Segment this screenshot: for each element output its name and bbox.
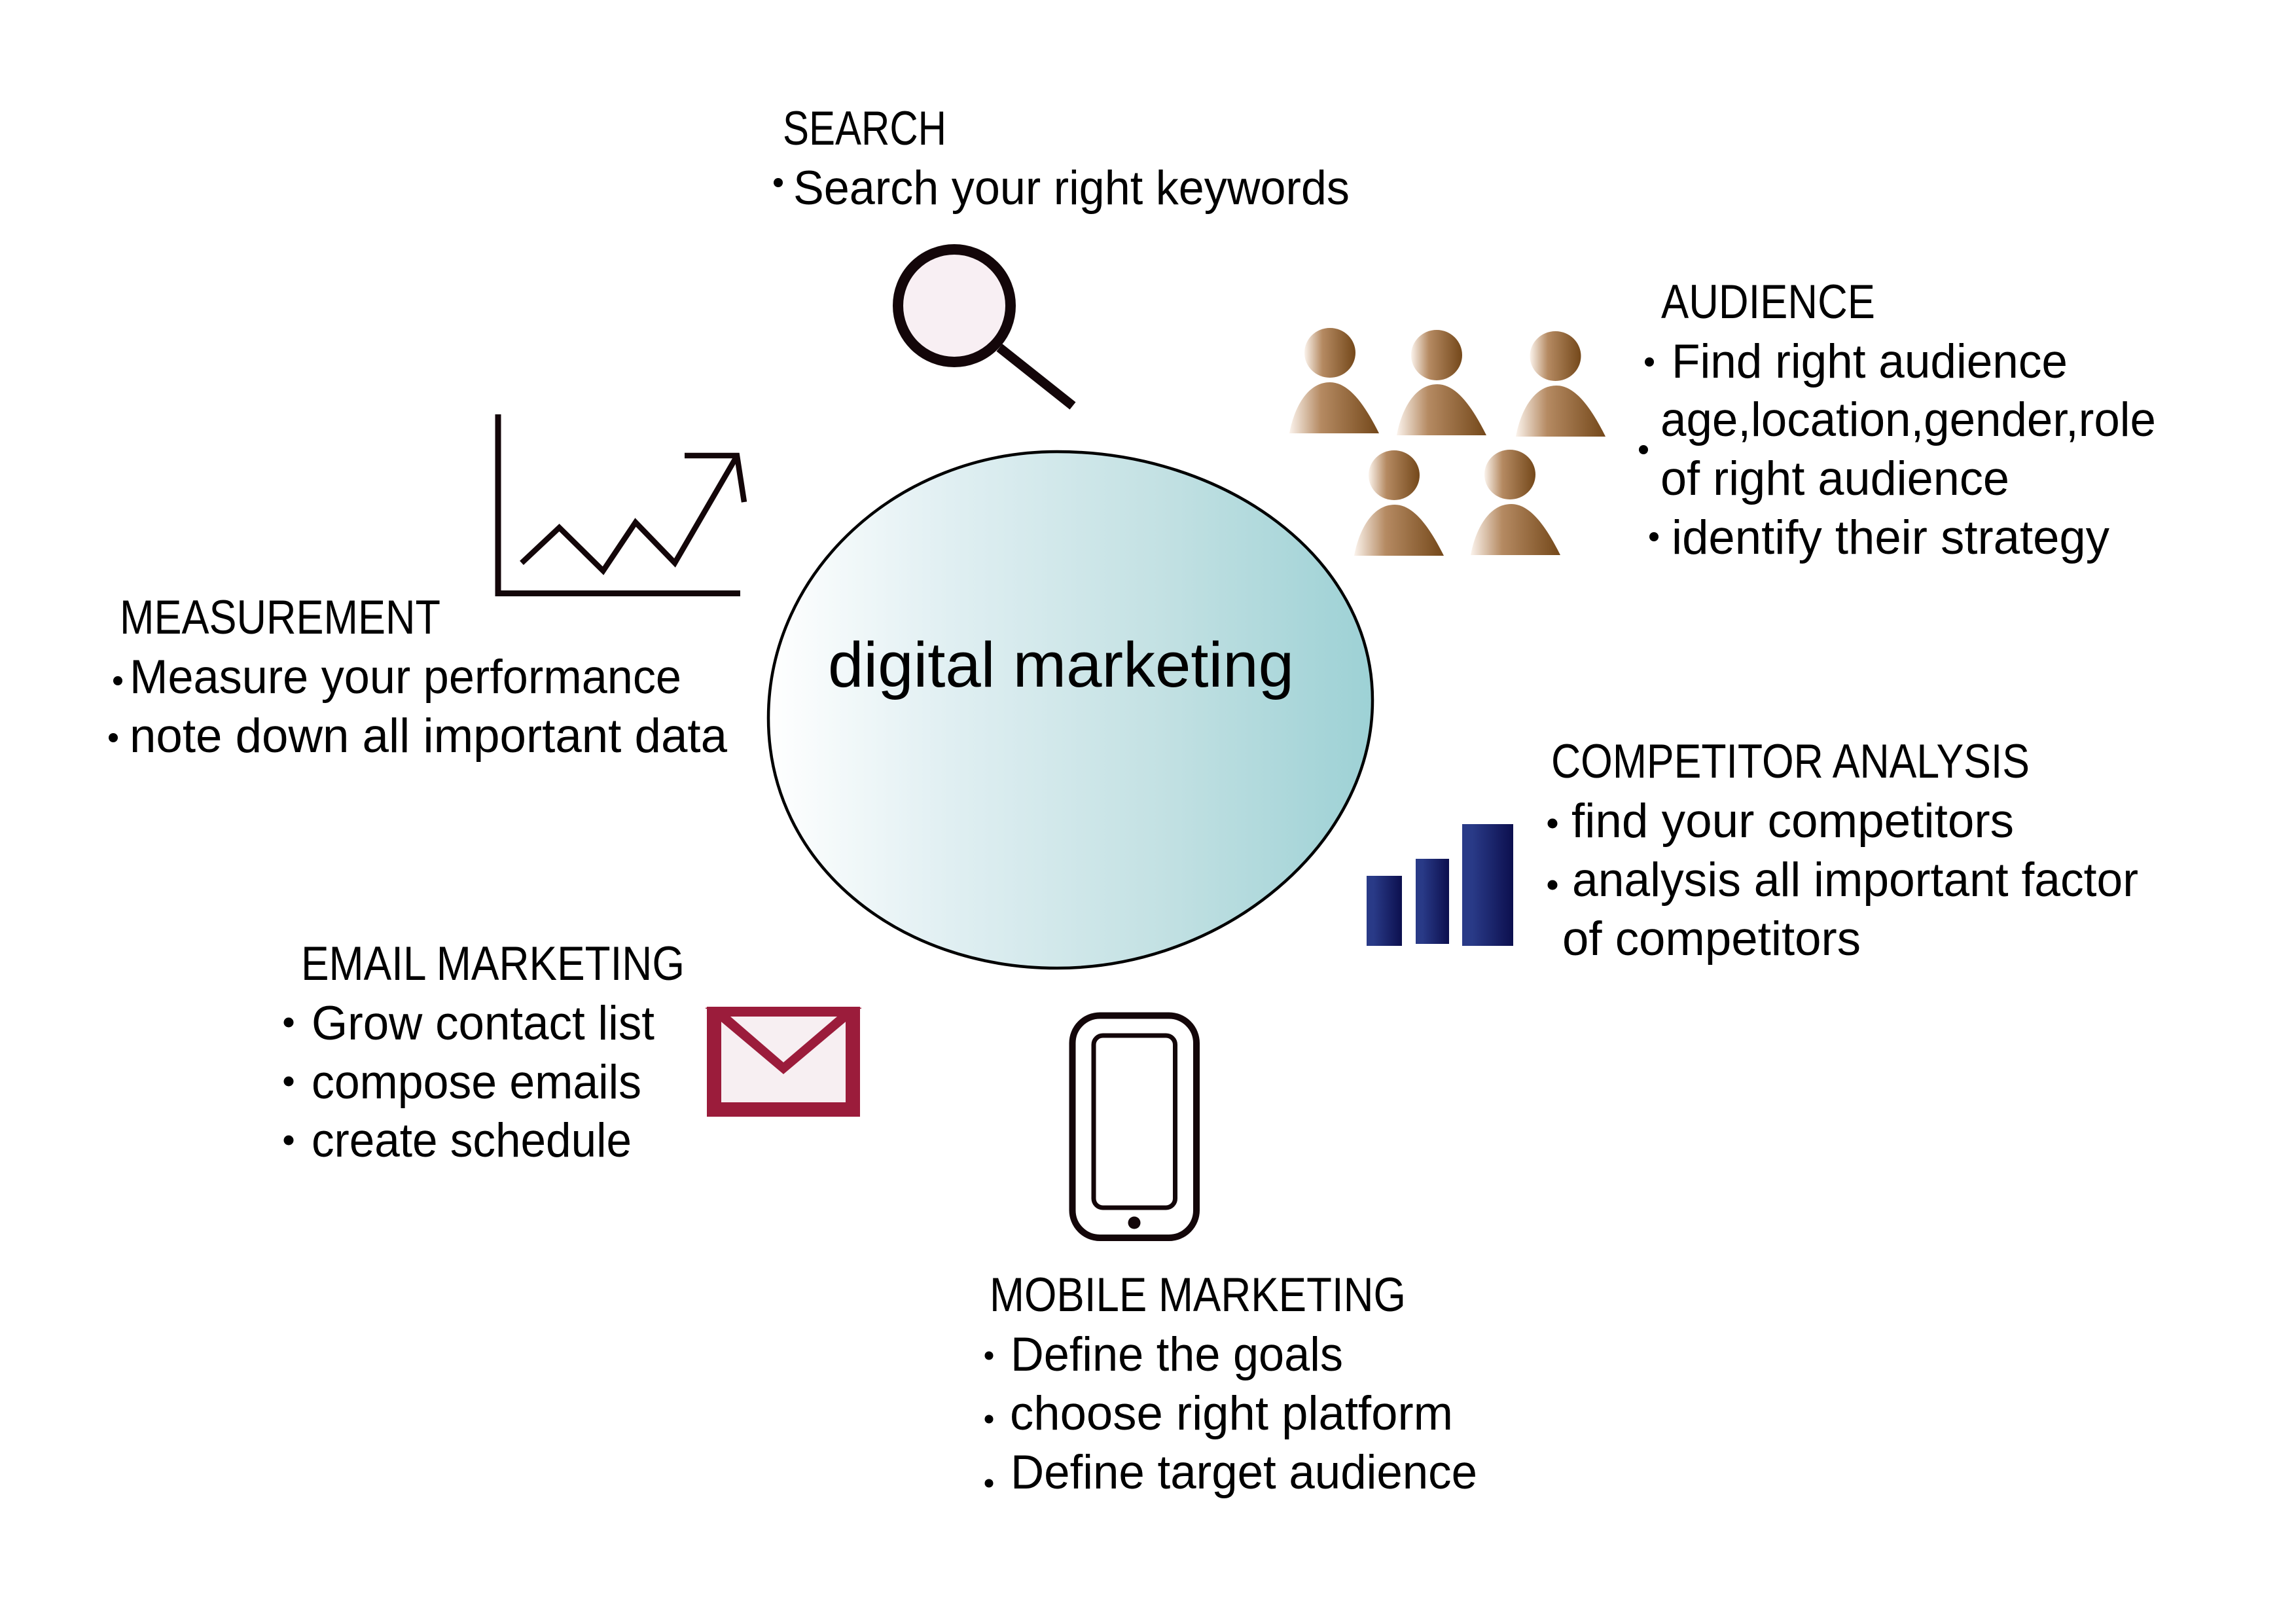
bullet: compose emails: compose emails (312, 1056, 641, 1109)
bullet: analysis factors: analysis all important factor (1572, 854, 2138, 907)
bullet: find competitors: find your competitors (1571, 795, 2014, 848)
person 4 (1354, 450, 1444, 556)
heading: measurement: MEASUREMENT (120, 591, 440, 644)
panel: audience (1289, 276, 2156, 564)
panel: email marketing (284, 937, 861, 1167)
icon: envelope (706, 1007, 861, 1117)
bullet: age, location, gender, role: age,location,gender,role (1660, 393, 2156, 446)
bullet: measure performance: Measure your performance (130, 651, 681, 704)
bullet: note down data: note down all important data (130, 710, 727, 763)
icon: magnifying glass (898, 249, 1073, 406)
icon: audience group (1289, 328, 1605, 556)
person 2 (1397, 330, 1486, 435)
panel: mobile marketing (984, 1016, 1477, 1499)
bullet: define the goals: Define the goals (1011, 1328, 1343, 1381)
icon: line chart with arrow (498, 414, 744, 593)
person 3 (1516, 331, 1605, 437)
heading: search: SEARCH (783, 102, 946, 155)
heading: audience: AUDIENCE (1661, 276, 1875, 329)
bullet: analysis factors (1547, 854, 2138, 965)
icon: bar chart (1367, 824, 1513, 946)
bullet: grow contact list: Grow contact list (312, 997, 655, 1050)
bullet: define target audience: Define target audience (1011, 1446, 1477, 1499)
bullet: create schedule: create schedule (312, 1114, 632, 1167)
bullet: find right audience: Find right audience (1672, 335, 2068, 388)
panel: search (774, 102, 1350, 406)
panel: competitor analysis (1367, 735, 2138, 965)
heading: email marketing: EMAIL MARKETING (301, 937, 685, 990)
heading: mobile marketing: MOBILE MARKETING (990, 1269, 1406, 1322)
heading: competitor analysis: COMPETITOR ANALYSIS (1551, 735, 2030, 788)
bullet: age, location, gender, role: of right audience (1660, 452, 2009, 505)
bullet: search keywords: Search your right keywords (793, 162, 1350, 215)
person 1 (1289, 328, 1379, 433)
person 5 (1471, 450, 1560, 555)
bullet: choose right platform: choose right platform (1010, 1387, 1453, 1440)
panel: measurement (109, 414, 744, 763)
bullet: age, location, gender, role (1639, 393, 2156, 505)
center title: digital marketing (828, 629, 1294, 700)
bullet: analysis factors: of competitors (1562, 912, 1861, 965)
bullet: identify strategy: identify their strategy (1672, 511, 2109, 564)
central ellipse: digital marketing (768, 452, 1372, 968)
icon: smartphone (1072, 1016, 1196, 1238)
